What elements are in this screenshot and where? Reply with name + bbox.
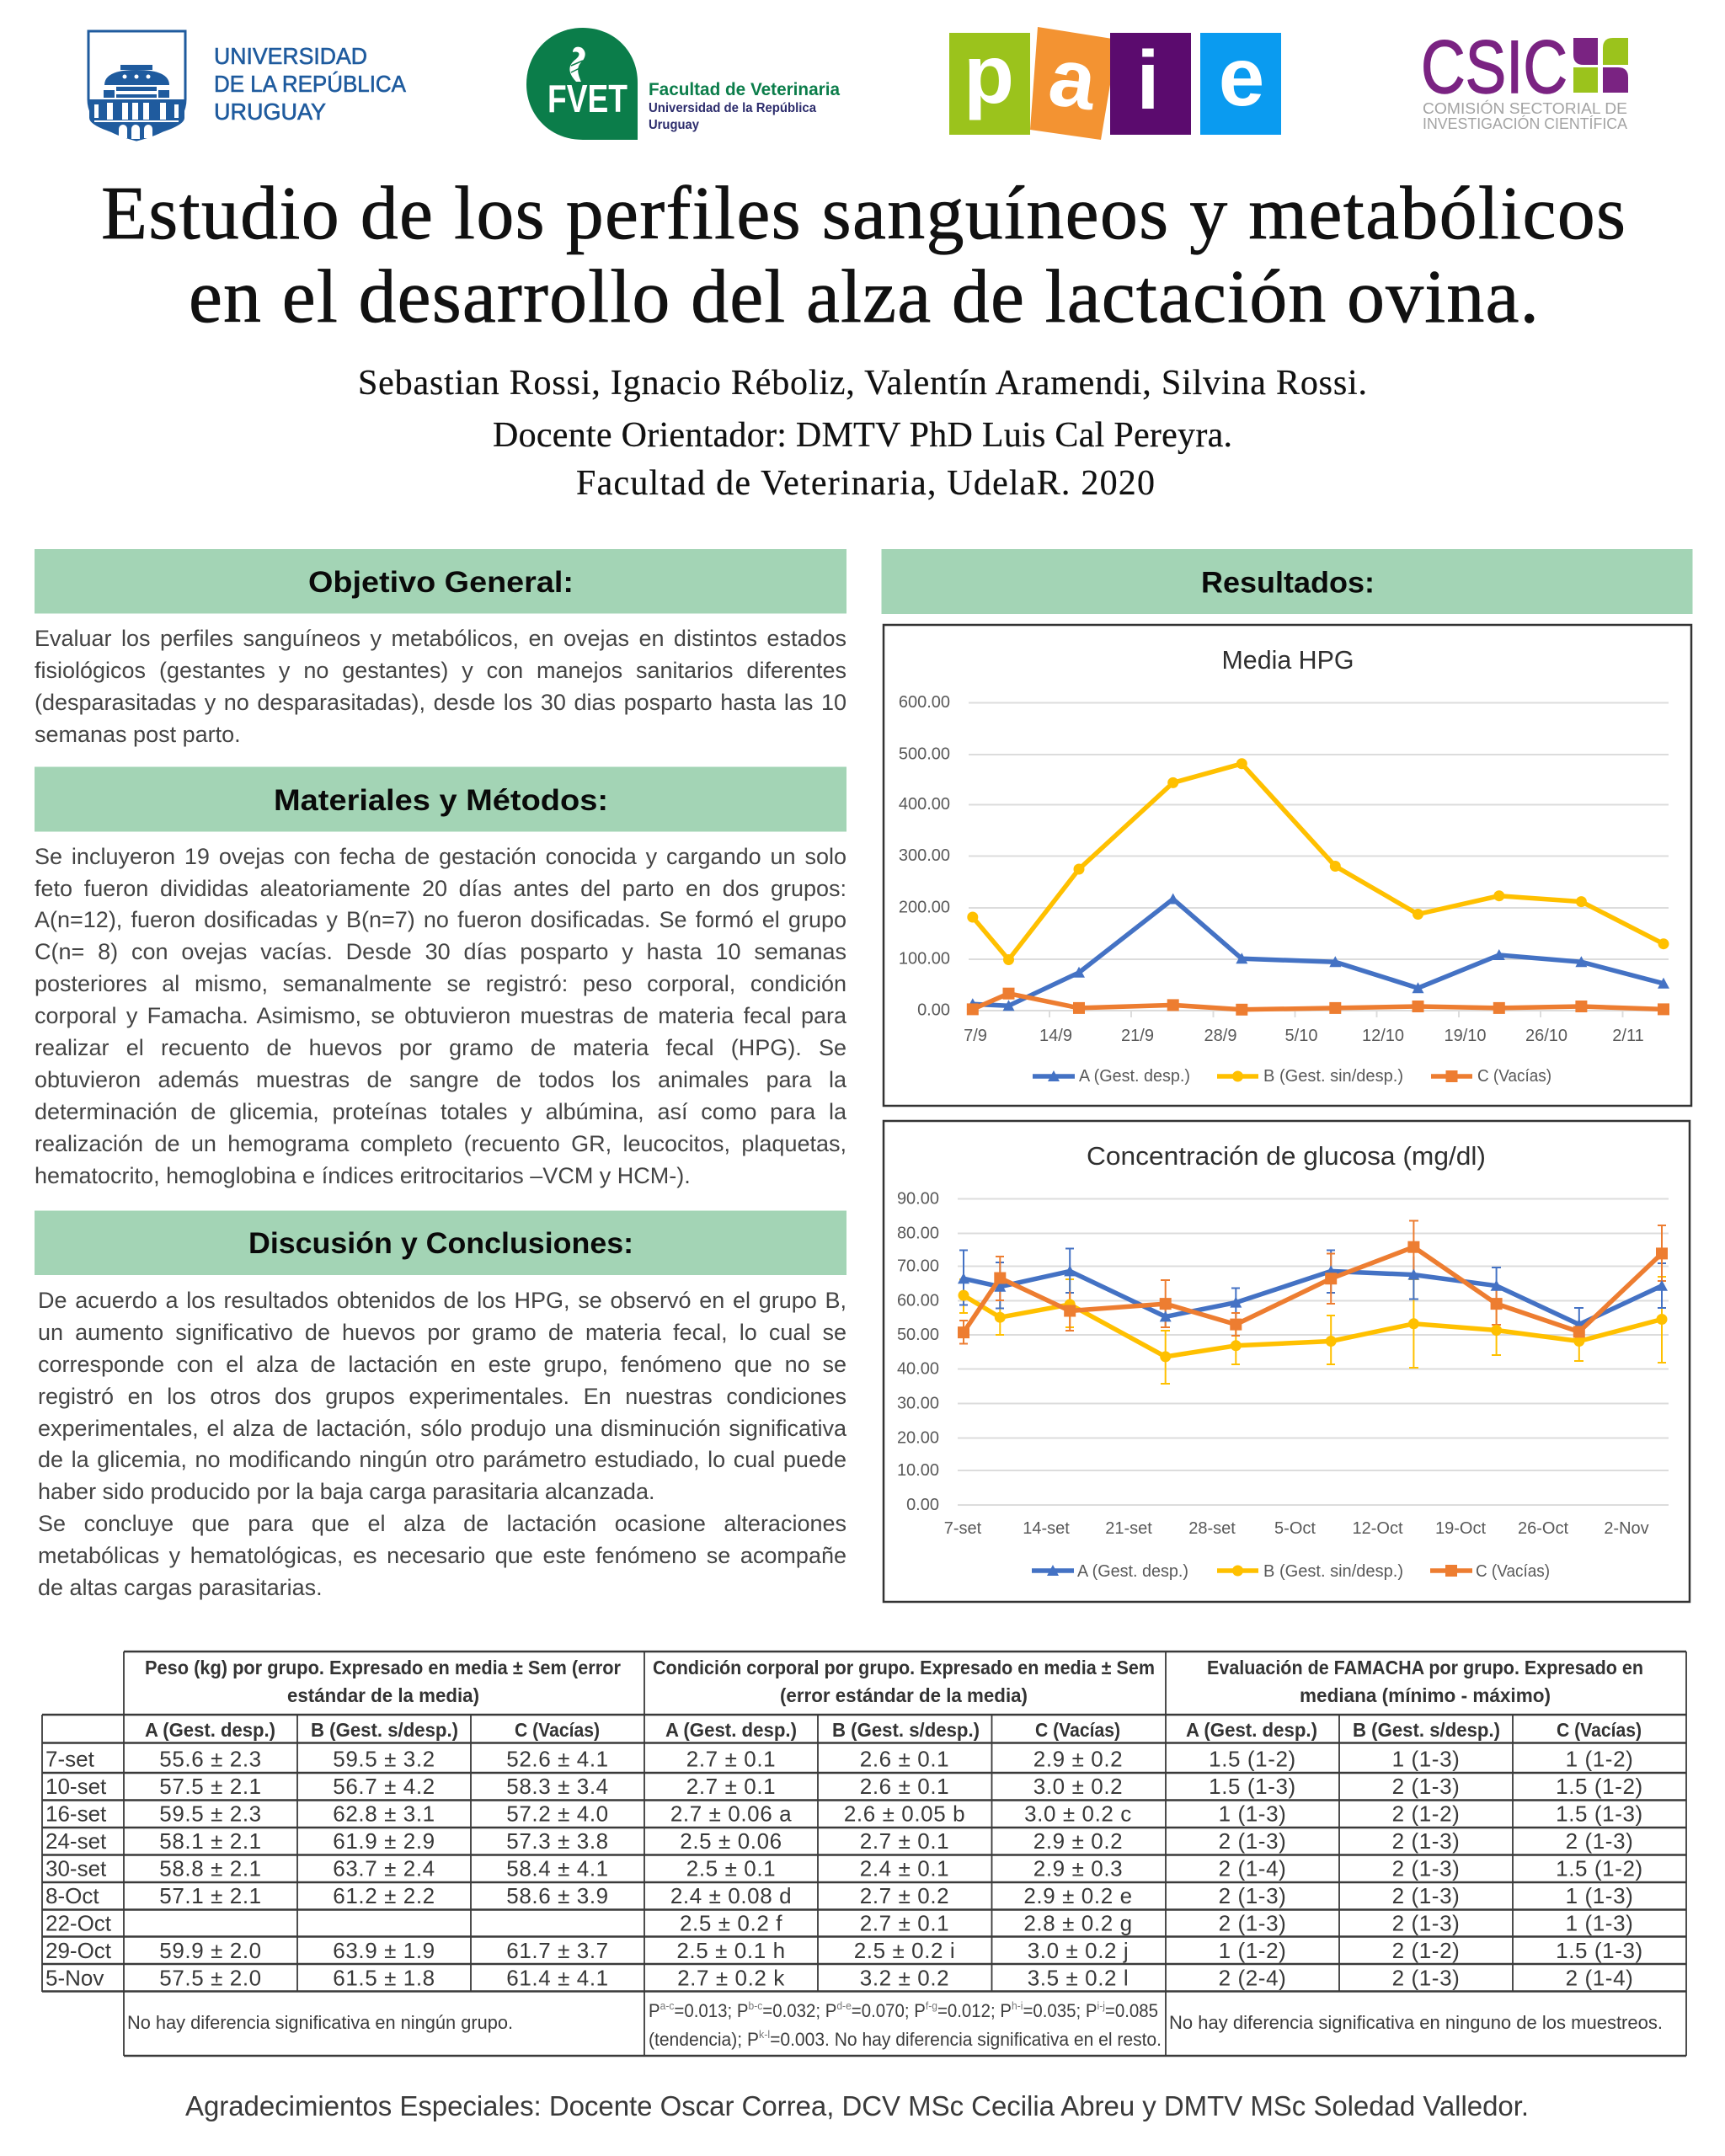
x axis labels: 7-set — [944, 1519, 982, 1538]
x axis labels: 7/9 — [964, 1027, 987, 1045]
y axis labels: 70.00 — [897, 1257, 939, 1275]
y axis labels: 0.00 — [906, 1496, 939, 1514]
table data: 2 (1-3) — [1566, 1828, 1633, 1854]
y axis labels: 90.00 — [897, 1189, 939, 1208]
table row labels: 29-Oct — [45, 1938, 112, 1963]
y axis labels: 200.00 — [899, 898, 950, 916]
table footnotes: h-i — [1012, 1999, 1023, 2012]
table group headers: mediana (mínimo - máximo) — [1300, 1684, 1551, 1706]
table column headers: A (Gest. desp.) — [665, 1719, 797, 1741]
text block: objetivo general: semanas post parto. — [35, 722, 241, 747]
table data: 2.5 ± 0.1 h — [676, 1938, 786, 1963]
text block: discusión y conclusiones: de altas cargas parasitarias. — [38, 1575, 323, 1600]
text block: materiales y métodos: obtuvieron además muestras de sangre de todos los animales para la — [35, 1067, 846, 1092]
text: CSIC wordmark: CSIC — [1421, 24, 1567, 109]
y axis labels: 50.00 — [897, 1326, 939, 1344]
table footnotes: =0.032; P — [762, 2000, 836, 2021]
series B line — [973, 764, 1664, 960]
series B line — [964, 1295, 1662, 1357]
y axis labels — [897, 1189, 939, 1514]
error bars C — [959, 1221, 1666, 1344]
table data: 2 (1-3) — [1392, 1828, 1460, 1854]
heading: Resultados — [881, 549, 1693, 614]
table data: 1.5 (1-2) — [1209, 1747, 1296, 1772]
table row labels: 24-set — [45, 1828, 107, 1854]
table data: 63.9 ± 1.9 — [333, 1938, 435, 1963]
table data: 2.7 ± 0.1 — [686, 1774, 776, 1799]
table data: 2.5 ± 0.2 i — [854, 1938, 955, 1963]
table data: 2 (1-3) — [1392, 1966, 1460, 1991]
table data: 58.1 ± 2.1 — [159, 1828, 262, 1854]
table data: 2.6 ± 0.05 b — [844, 1801, 965, 1826]
text block: materiales y métodos: Se incluyeron 19 ovejas con fecha de gestación conocida y cargando un solo — [35, 844, 846, 869]
text block: discusión y conclusiones — [38, 1288, 846, 1600]
text block: discusión y conclusiones: Se concluye que para que el alza de lactación ocasione alteraciones — [38, 1511, 846, 1536]
table data — [159, 1747, 1643, 1991]
table data: 2 (1-3) — [1392, 1856, 1460, 1881]
text block: objetivo general: (desparasitadas y no desparasitadas), desde los 30 dias posparto hasta las 10 — [35, 690, 846, 715]
error bars A — [959, 1248, 1666, 1341]
x axis labels: 5/10 — [1285, 1027, 1317, 1045]
table data: 1.5 (1-2) — [1556, 1856, 1643, 1881]
authors and affiliation: Sebastian Rossi, Ignacio Réboliz, Valentín Aramendi, Silvina Rossi. — [358, 364, 1367, 403]
table row labels: 8-Oct — [45, 1883, 99, 1908]
text block: discusión y conclusiones: registró en los otros dos grupos experimentales. En nuestras condiciones — [38, 1384, 846, 1409]
y axis labels: 10.00 — [897, 1461, 939, 1480]
table data: 55.6 ± 2.3 — [159, 1747, 262, 1772]
table data: 1 (1-3) — [1566, 1883, 1633, 1908]
table data: 2.4 ± 0.1 — [860, 1856, 949, 1881]
text: faculty name — [649, 80, 840, 132]
error bars B — [959, 1277, 1666, 1384]
logo: PAIE: e — [1219, 30, 1264, 123]
heading: Resultados: Resultados: — [1201, 566, 1375, 600]
table data: 2 (1-4) — [1566, 1966, 1633, 1991]
logo: PAIE: p — [964, 28, 1014, 120]
table data: 62.8 ± 3.1 — [333, 1801, 435, 1826]
table row labels: 7-set — [45, 1747, 95, 1772]
x axis labels: 26/10 — [1525, 1027, 1567, 1045]
table row labels: 16-set — [45, 1801, 107, 1826]
chart: Media HPG — [884, 625, 1691, 1106]
y axis labels: 0.00 — [917, 1001, 950, 1019]
x axis labels: 21/9 — [1121, 1027, 1154, 1045]
legend — [1032, 1562, 1550, 1581]
table data: 52.6 ± 4.1 — [506, 1747, 609, 1772]
table data: 57.5 ± 2.1 — [159, 1774, 262, 1799]
x axis labels: 28/9 — [1204, 1027, 1236, 1045]
text block: materiales y métodos: realización de un hemograma completo (recuento GR, leucocitos, plaquetas, — [35, 1131, 846, 1156]
heading: Discusión y Conclusiones: Discusión y Conclusiones: — [248, 1227, 633, 1260]
icon: FVET green badge: FVET — [547, 77, 628, 120]
text block: discusión y conclusiones: De acuerdo a los resultados obtenidos de los HPG, se observó en el grupo B, — [38, 1288, 846, 1313]
table data: 2 (1-3) — [1219, 1828, 1286, 1854]
title: en el desarrollo del alza de lactación ovina. — [189, 255, 1539, 339]
table data: 57.5 ± 2.0 — [159, 1966, 262, 1991]
table data: 3.0 ± 0.2 — [1033, 1774, 1123, 1799]
text block: materiales y métodos: determinación de glicemia, proteínas totales y albúmina, así como para la — [35, 1099, 846, 1124]
y axis labels: 600.00 — [899, 693, 950, 712]
table footnotes: =0.013; P — [674, 2000, 748, 2021]
table footnotes: =0.035; P — [1023, 2000, 1097, 2021]
heading: Discusión y Conclusiones — [35, 1211, 846, 1275]
table column headers: C (Vacías) — [1035, 1719, 1120, 1741]
legend: C (Vacías) — [1477, 1067, 1551, 1086]
table footnotes: k-l — [759, 2028, 770, 2041]
table row labels: 10-set — [45, 1774, 107, 1799]
x axis labels: 26-Oct — [1518, 1519, 1568, 1538]
table column headers: B (Gest. s/desp.) — [1353, 1719, 1500, 1741]
logo: FVET — [526, 28, 840, 140]
chart title: Concentración de glucosa (mg/dl) — [1087, 1141, 1486, 1171]
text: faculty name: Uruguay — [649, 118, 699, 132]
table data: 56.7 ± 4.2 — [333, 1774, 435, 1799]
table data: 2.7 ± 0.2 k — [677, 1966, 785, 1991]
text block: discusión y conclusiones: un aumento significativo de huevos por gramo de materia fecal, lo cual se — [38, 1320, 846, 1345]
table group headers: Evaluación de FAMACHA por grupo. Expresado en — [1207, 1657, 1643, 1678]
table data: 2 (1-3) — [1392, 1883, 1460, 1908]
table group headers: Condición corporal por grupo. Expresado en media ± Sem — [653, 1657, 1155, 1678]
table group headers — [145, 1657, 1643, 1706]
y axis labels: 80.00 — [897, 1225, 939, 1243]
table data: 63.7 ± 2.4 — [333, 1856, 435, 1881]
heading: Materiales y Métodos: Materiales y Métodos: — [274, 784, 608, 817]
title — [101, 172, 1626, 339]
legend: C (Vacías) — [1476, 1562, 1550, 1581]
authors and affiliation: Facultad de Veterinaria, UdelaR. 2020 — [576, 464, 1155, 503]
x axis labels: 21-set — [1105, 1519, 1152, 1538]
legend — [1033, 1067, 1551, 1086]
x axis labels: 19/10 — [1444, 1027, 1487, 1045]
table data: 2.5 ± 0.06 — [680, 1828, 782, 1854]
table data: 2.7 ± 0.1 — [686, 1747, 776, 1772]
x axis labels: 2/11 — [1612, 1027, 1644, 1045]
legend: B (Gest. sin/desp.) — [1263, 1067, 1403, 1086]
text block: materiales y métodos: realizar el recuento de huevos por gramo de materia fecal (HPG). Se — [35, 1035, 846, 1060]
table column headers — [145, 1719, 1642, 1741]
table footnotes: b-c — [748, 1999, 763, 2012]
table column headers: C (Vacías) — [1557, 1719, 1642, 1741]
table data: 58.4 ± 4.1 — [506, 1856, 609, 1881]
table data: 57.2 ± 4.0 — [506, 1801, 609, 1826]
text: university name — [214, 43, 406, 125]
table data: 2.5 ± 0.1 — [686, 1856, 776, 1881]
table data: 2.9 ± 0.2 — [1033, 1828, 1123, 1854]
icon: CSIC squares — [1573, 38, 1628, 93]
table data: 61.9 ± 2.9 — [333, 1828, 435, 1854]
y axis labels: 500.00 — [899, 744, 950, 763]
text block: objetivo general — [35, 626, 846, 747]
table row labels: 5-Nov — [45, 1966, 104, 1991]
table footnotes: d-e — [836, 1999, 852, 2012]
heading: Objetivo General: Objetivo General: — [308, 566, 574, 599]
table data: 58.3 ± 3.4 — [506, 1774, 609, 1799]
y axis labels: 100.00 — [899, 950, 950, 969]
text block: discusión y conclusiones: metabólicas y hematológicas, es necesario que este fenómeno se acompañe — [38, 1543, 846, 1568]
table footnotes: a-c — [660, 1999, 675, 2012]
y axis labels: 60.00 — [897, 1292, 939, 1310]
table data: 2.9 ± 0.3 — [1033, 1856, 1123, 1881]
table data: 2.7 ± 0.1 — [860, 1910, 949, 1935]
table data: 1.5 (1-2) — [1556, 1774, 1643, 1799]
text block: discusión y conclusiones: haber sido producido por la baja carga parasitaria alcanzada. — [38, 1479, 654, 1504]
x axis labels: 28-set — [1188, 1519, 1236, 1538]
x axis labels: 2-Nov — [1604, 1519, 1649, 1538]
text block: materiales y métodos: feto fueron divididas aleatoriamente 20 días antes del parto en dos grupos: — [35, 876, 846, 901]
icon: shield with building — [88, 31, 185, 140]
table data: 1 (1-2) — [1566, 1747, 1633, 1772]
text block: materiales y métodos: hematocrito, hemoglobina e índices eritrocitarios –VCM y HCM-). — [35, 1163, 691, 1188]
table footnotes: f-g — [926, 1999, 937, 2012]
table data: 61.4 ± 4.1 — [506, 1966, 609, 1991]
table footnotes: i-j — [1097, 1999, 1105, 2012]
y axis labels: 300.00 — [899, 846, 950, 865]
table data: 59.5 ± 3.2 — [333, 1747, 435, 1772]
authors and affiliation — [358, 364, 1367, 503]
table footnotes: =0.085 — [1105, 2000, 1158, 2021]
table data: 2.4 ± 0.08 d — [670, 1883, 792, 1908]
x axis labels — [964, 1027, 1644, 1045]
table data: 1.5 (1-3) — [1556, 1938, 1643, 1963]
table row labels — [45, 1747, 112, 1991]
text block: materiales y métodos: C(n= 8) con ovejas vacías. Desde 30 días posparto y hasta 10 semanas — [35, 939, 846, 964]
table data: 58.6 ± 3.9 — [506, 1883, 609, 1908]
table column headers: B (Gest. s/desp.) — [832, 1719, 980, 1741]
text block: discusión y conclusiones: experimentales, el alza de lactación, sólo produjo una disminución significativa — [38, 1416, 846, 1441]
table data: 57.1 ± 2.1 — [159, 1883, 262, 1908]
text: CSIC subtitle — [1423, 99, 1627, 132]
text block: discusión y conclusiones: corresponde con el alza de lactación en este grupo, fenómeno que no se — [38, 1352, 846, 1377]
table column headers: A (Gest. desp.) — [145, 1719, 275, 1741]
x axis labels: 14/9 — [1039, 1027, 1072, 1045]
table data: 2.5 ± 0.2 f — [680, 1910, 782, 1935]
text block: objetivo general: Evaluar los perfiles sanguíneos y metabólicos, en ovejas en distintos estados — [35, 626, 846, 651]
table data: 2 (1-2) — [1392, 1938, 1460, 1963]
table column headers: A (Gest. desp.) — [1186, 1719, 1317, 1741]
table data: 3.0 ± 0.2 j — [1028, 1938, 1129, 1963]
series C line — [973, 994, 1664, 1010]
table data: 2.9 ± 0.2 — [1033, 1747, 1123, 1772]
text block: discusión y conclusiones: de la glicemia, no modificando ningún otro parámetro estudiado, lo cual puede — [38, 1447, 846, 1472]
table column headers: B (Gest. s/desp.) — [311, 1719, 458, 1741]
logo: Universidad de la República — [88, 31, 406, 140]
table data: 58.8 ± 2.1 — [159, 1856, 262, 1881]
table footnotes — [127, 1999, 1663, 2050]
table data: 2 (1-3) — [1392, 1910, 1460, 1935]
table group headers: Peso (kg) por grupo. Expresado en media ± Sem (error — [145, 1657, 621, 1678]
y axis labels: 40.00 — [897, 1359, 939, 1378]
footer: acknowledgements: Agradecimientos Especiales: Docente Oscar Correa, DCV MSc Cecilia Abreu y DMTV MSc Soledad Valledor. — [185, 2090, 1529, 2121]
x axis labels: 12/10 — [1362, 1027, 1404, 1045]
table data: 2.8 ± 0.2 g — [1023, 1910, 1133, 1935]
table data: 2.9 ± 0.2 e — [1023, 1883, 1133, 1908]
table data: 3.0 ± 0.2 c — [1024, 1801, 1132, 1826]
table row labels: 30-set — [45, 1856, 107, 1881]
title: Estudio de los perfiles sanguíneos y metabólicos — [101, 172, 1626, 255]
table data: 2 (1-3) — [1219, 1910, 1286, 1935]
table footnotes: P — [649, 2000, 661, 2021]
table data: 59.9 ± 2.0 — [159, 1938, 262, 1963]
heading: Materiales y Métodos — [35, 766, 846, 832]
logo: PAIE: a — [1044, 29, 1103, 128]
y axis labels — [899, 693, 950, 1019]
table data: 2.7 ± 0.2 — [860, 1883, 949, 1908]
y axis labels: 400.00 — [899, 795, 950, 814]
x axis labels: 5-Oct — [1274, 1519, 1316, 1538]
y axis labels: 30.00 — [897, 1395, 939, 1413]
table data: 2.6 ± 0.1 — [860, 1747, 949, 1772]
series A line — [964, 1271, 1662, 1325]
table data: 3.2 ± 0.2 — [860, 1966, 949, 1991]
table data: 1 (1-2) — [1219, 1938, 1286, 1963]
logo: PAIE: i — [1136, 34, 1160, 126]
table data: 2 (1-3) — [1392, 1774, 1460, 1799]
icon: FVET green badge — [526, 28, 638, 140]
table group headers: (error estándar de la media) — [780, 1684, 1028, 1706]
chart: Concentración de glucosa — [884, 1121, 1690, 1602]
heading: Objetivo General — [35, 549, 846, 613]
text: CSIC subtitle: COMISIÓN SECTORIAL DE — [1423, 99, 1627, 117]
table data: 2 (2-4) — [1219, 1966, 1286, 1991]
table data: 61.5 ± 1.8 — [333, 1966, 435, 1991]
table footnotes: =0.012; P — [937, 2000, 1012, 2021]
x axis labels — [944, 1519, 1649, 1538]
table footnotes: (tendencia); P — [649, 2029, 764, 2050]
legend: A (Gest. desp.) — [1079, 1067, 1190, 1086]
table data: 1 (1-3) — [1566, 1910, 1633, 1935]
table data: 61.2 ± 2.2 — [333, 1883, 435, 1908]
table data: 1.5 (1-3) — [1209, 1774, 1296, 1799]
legend: B (Gest. sin/desp.) — [1263, 1562, 1403, 1581]
table footnotes: =0.003. No hay diferencia significativa en el resto. — [770, 2029, 1162, 2050]
text: CSIC subtitle: INVESTIGACIÓN CIENTÍFICA — [1423, 115, 1627, 132]
text block: materiales y métodos — [35, 844, 846, 1188]
legend: A (Gest. desp.) — [1077, 1562, 1188, 1581]
table data: 59.5 ± 2.3 — [159, 1801, 262, 1826]
y axis labels: 20.00 — [897, 1428, 939, 1447]
table data: 61.7 ± 3.7 — [506, 1938, 609, 1963]
authors and affiliation: Docente Orientador: DMTV PhD Luis Cal Pereyra. — [493, 416, 1232, 455]
x axis labels: 19-Oct — [1435, 1519, 1486, 1538]
table data: 1 (1-3) — [1219, 1801, 1286, 1826]
text block: materiales y métodos: posteriores al mismo, semanalmente se registró: peso corporal, condición — [35, 971, 846, 996]
text: faculty name: Facultad de Veterinaria — [649, 80, 840, 99]
logo: CSIC — [1421, 24, 1628, 132]
x axis labels: 14-set — [1023, 1519, 1070, 1538]
table group headers: estándar de la media) — [287, 1684, 479, 1706]
text block: materiales y métodos: corporal y Famacha. Asimismo, se obtuvieron muestras de materia fecal para — [35, 1003, 846, 1028]
table data: 2 (1-2) — [1392, 1801, 1460, 1826]
text block: objetivo general: fisiológicos (gestantes y no gestantes) y con manejos sanitarios diferentes — [35, 658, 846, 683]
table: peso, condición corporal y FAMACHA — [42, 1652, 1686, 2056]
table footnotes: No hay diferencia significativa en ninguno de los muestreos. — [1169, 2012, 1663, 2033]
table column headers: C (Vacías) — [515, 1719, 600, 1741]
table data: 2.7 ± 0.1 — [860, 1828, 949, 1854]
series C line — [964, 1247, 1662, 1332]
text: university name: DE LA REPÚBLICA — [214, 71, 406, 97]
series A line — [973, 899, 1664, 1006]
table data: 3.5 ± 0.2 l — [1028, 1966, 1129, 1991]
table data: 2 (1-3) — [1219, 1883, 1286, 1908]
chart title: Media HPG — [1221, 645, 1354, 675]
logo: PAIE — [949, 27, 1281, 140]
table data: 1.5 (1-3) — [1556, 1801, 1643, 1826]
text block: materiales y métodos: A(n=12), fueron dosificadas y B(n=7) no fueron dosificadas. Se formó el grupo — [35, 907, 846, 932]
text: university name: UNIVERSIDAD — [214, 43, 367, 69]
table row labels: 22-Oct — [45, 1910, 112, 1935]
table data: 2.6 ± 0.1 — [860, 1774, 949, 1799]
table data: 1 (1-3) — [1392, 1747, 1460, 1772]
table data: 2.7 ± 0.06 a — [670, 1801, 792, 1826]
x axis labels: 12-Oct — [1352, 1519, 1403, 1538]
table data: 57.3 ± 3.8 — [506, 1828, 609, 1854]
text: university name: URUGUAY — [214, 99, 326, 125]
table data: 2 (1-4) — [1219, 1856, 1286, 1881]
table footnotes: No hay diferencia significativa en ningún grupo. — [127, 2012, 513, 2033]
table footnotes: =0.070; P — [852, 2000, 926, 2021]
text: faculty name: Universidad de la República — [649, 101, 816, 115]
